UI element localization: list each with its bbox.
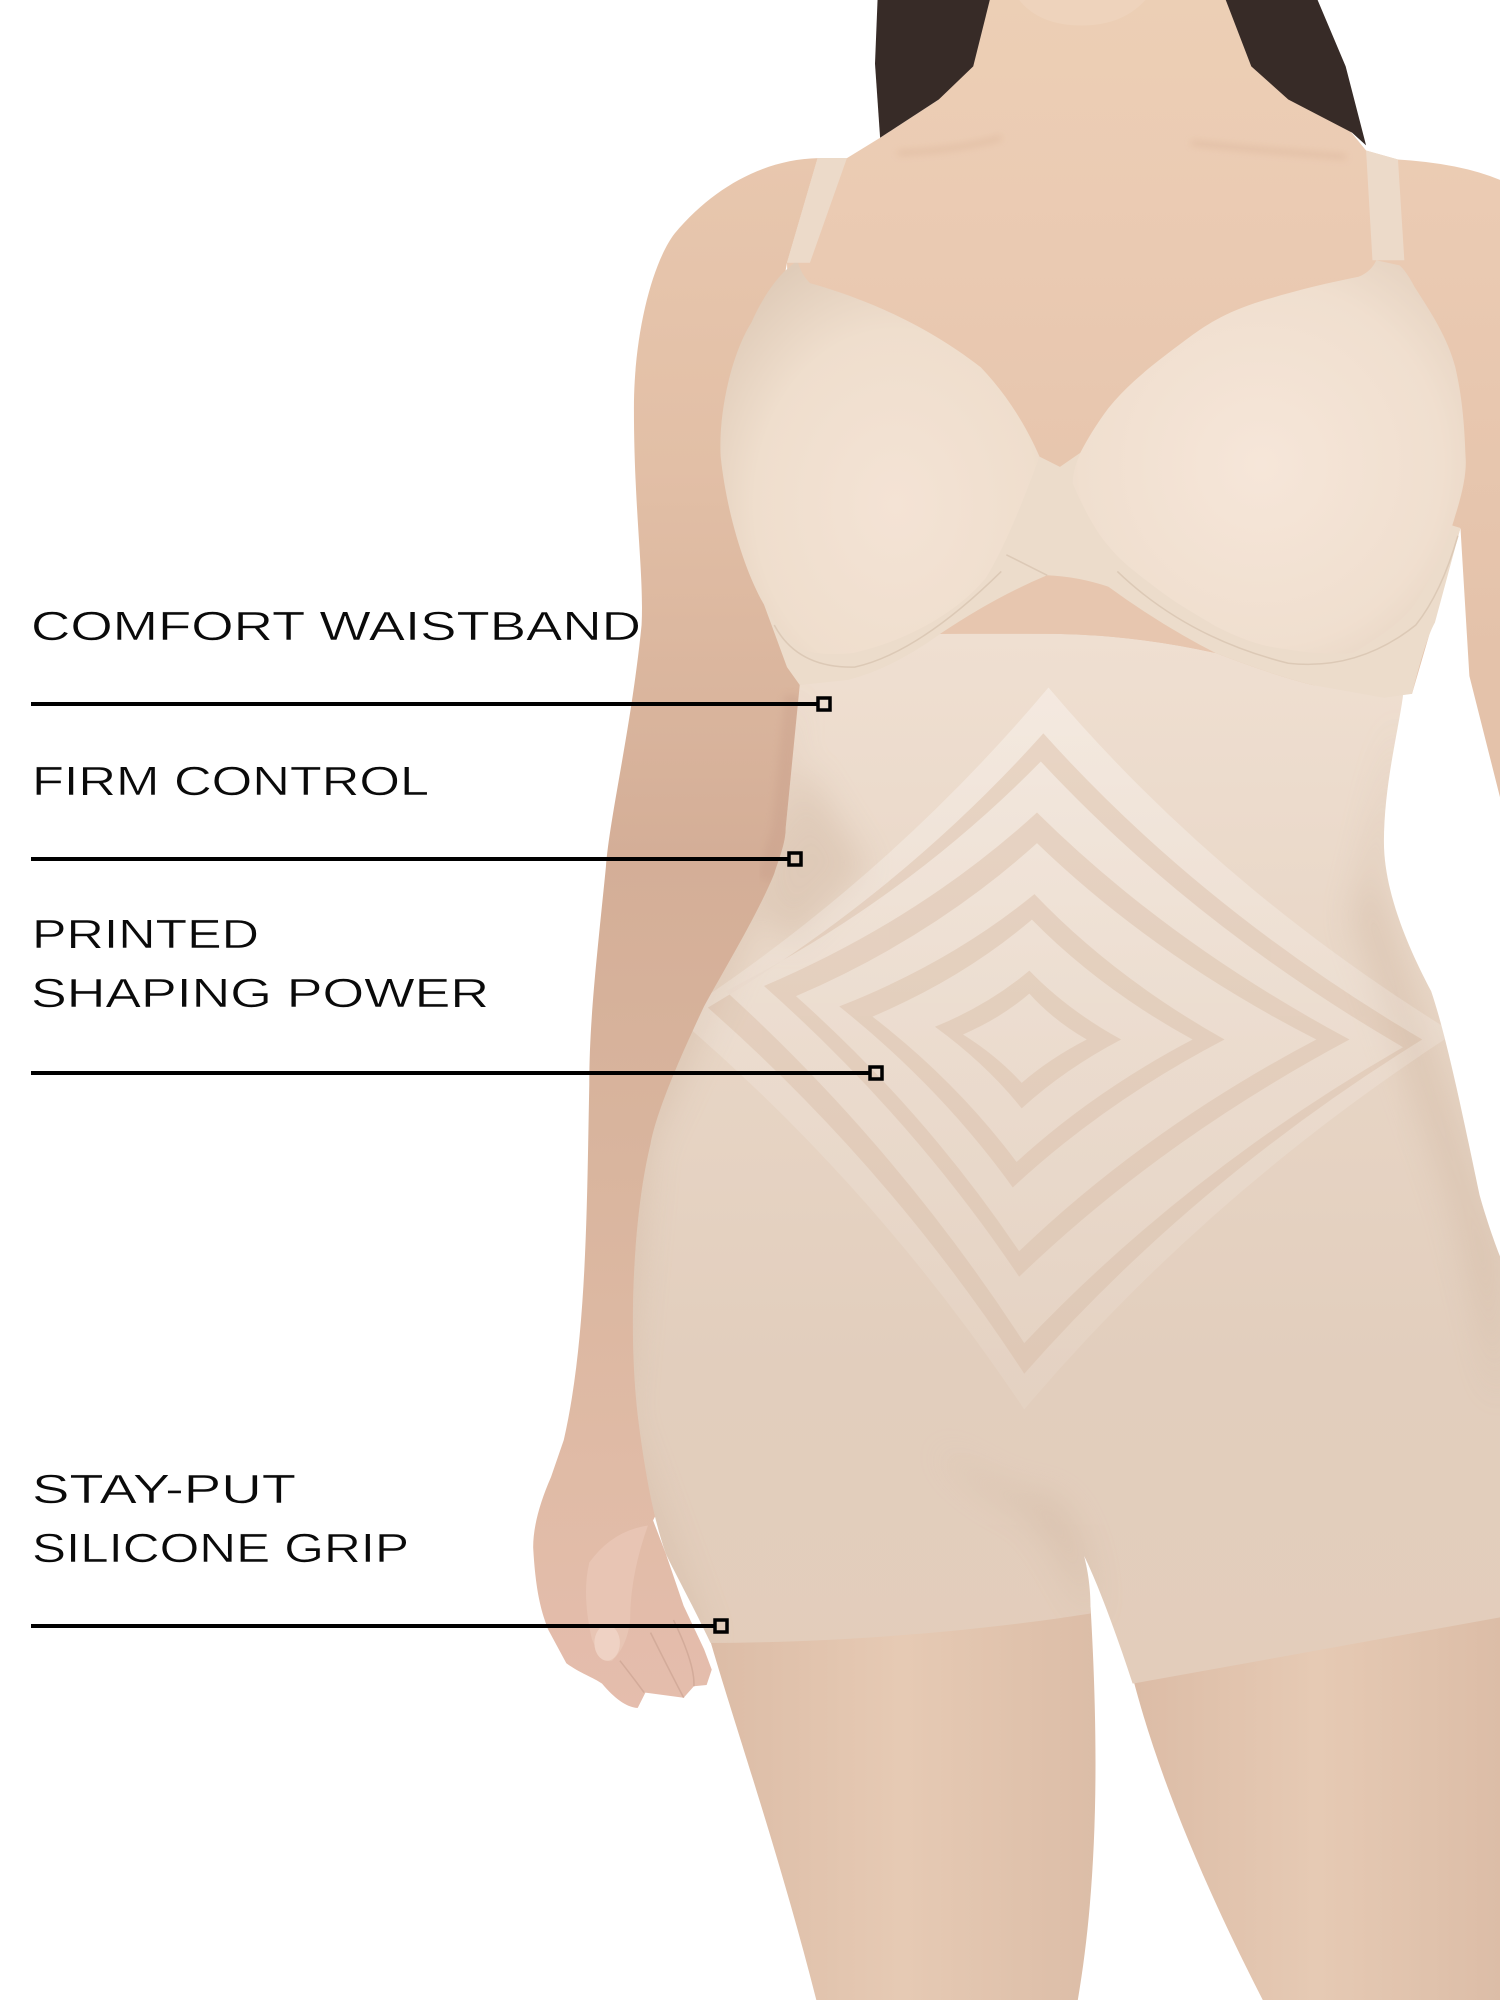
marker — [789, 853, 801, 865]
marker — [818, 698, 830, 710]
arm inner shadow — [765, 695, 793, 880]
label text first line: PRINTED — [32, 911, 259, 957]
diamond print pattern — [693, 688, 1444, 1132]
garment base — [612, 612, 1500, 1709]
callout: printed shaping power — [31, 911, 882, 1079]
left leg — [708, 1607, 1096, 2000]
marker — [870, 1067, 882, 1079]
callout: stay-put silicone grip — [31, 1466, 727, 1632]
thumb — [586, 1526, 648, 1661]
leader line — [31, 702, 818, 706]
model figure wearing shaping garment — [533, 0, 1500, 2000]
right leg — [1133, 1610, 1500, 2000]
shapewear garment — [599, 612, 1500, 1709]
chin — [1019, 0, 1145, 26]
left bra cup — [720, 260, 1040, 654]
leader line — [31, 857, 789, 861]
right bra strap — [1366, 151, 1404, 260]
label text: COMFORT WAISTBAND — [31, 603, 641, 649]
dark diamond bands — [726, 734, 1367, 1042]
marker — [715, 1620, 727, 1632]
garment shading — [634, 772, 1496, 1578]
callout: firm control — [31, 758, 801, 865]
label text second line: SILICONE GRIP — [32, 1525, 409, 1571]
label text: FIRM CONTROL — [32, 758, 429, 804]
leader line — [31, 1071, 870, 1075]
label text first line: STAY-PUT — [32, 1466, 296, 1512]
arm and hand — [533, 158, 842, 1708]
callout: comfort waistband — [31, 603, 830, 710]
exposed skin under bridge — [940, 575, 1216, 653]
thumb nail — [594, 1625, 620, 1661]
bra band and center gore — [764, 453, 1460, 698]
bra band seams — [774, 536, 1458, 667]
upper torso and neck — [787, 0, 1500, 797]
leader line — [31, 1624, 715, 1628]
collarbone shading — [898, 138, 1346, 157]
label text second line: SHAPING POWER — [31, 970, 489, 1016]
left bra strap — [787, 158, 847, 263]
light diamond bands — [693, 688, 1444, 1132]
right bra cup — [1073, 260, 1466, 654]
finger creases — [620, 1620, 694, 1698]
hair — [875, 0, 1366, 145]
